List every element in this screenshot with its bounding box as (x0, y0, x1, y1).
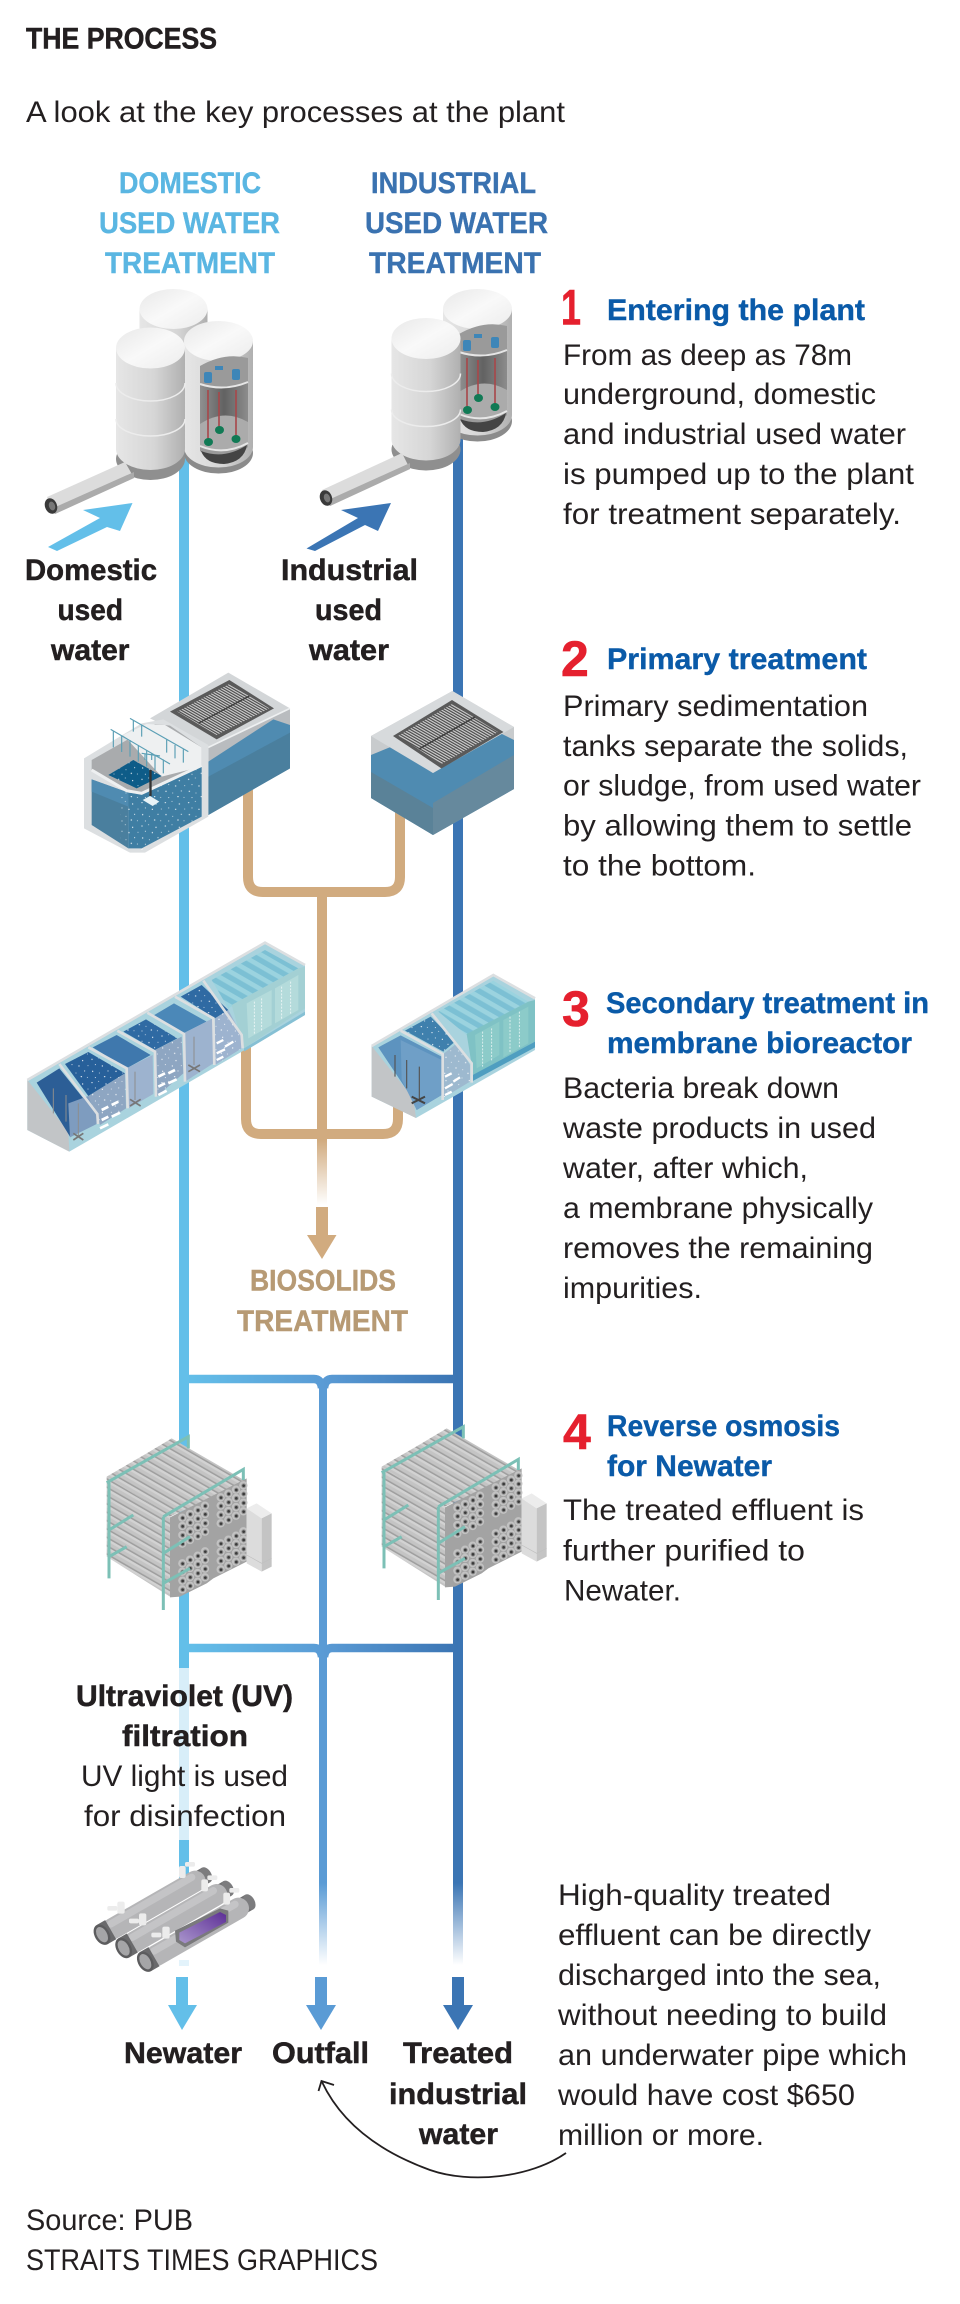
icon: industrial reverse osmosis unit (382, 1427, 547, 1600)
arrow: to biosolids treatment (307, 1207, 336, 1259)
label: ultraviolet filtration: filtration (122, 1720, 248, 1753)
label: biosolids treatment: TREATMENT (237, 1305, 408, 1338)
step 3: secondary treatment in membrane bioreactor: waste products in used (562, 1112, 876, 1145)
callout: high-quality treated effluent: an underwater pipe which (558, 2039, 907, 2072)
label: biosolids treatment: BIOSOLIDS (250, 1264, 396, 1298)
step 1: entering the plant: underground, domestic (563, 378, 876, 411)
callout: high-quality treated effluent: million or more. (558, 2119, 764, 2152)
step 3: secondary treatment in membrane bioreactor: removes the remaining (563, 1232, 873, 1265)
icon: domestic primary sedimentation tank (84, 673, 290, 853)
step 1: entering the plant: From as deep as 78m (563, 339, 852, 372)
step 4: reverse osmosis for newater: 4 (563, 1404, 591, 1460)
step 1: entering the plant: and industrial used water (563, 418, 906, 451)
label: domestic used water (25, 554, 157, 667)
step 3: secondary treatment in membrane bioreactor: Bacteria break down (563, 1072, 839, 1105)
source credit: STRAITS TIMES GRAPHICS (26, 2244, 378, 2277)
label: industrial used water: Industrial (281, 554, 418, 587)
step 1: entering the plant: is pumped up to the plant (563, 458, 915, 491)
label: industrial used water (281, 554, 418, 667)
biosolids pipes (246, 790, 400, 1205)
icon: UV filtration units (90, 1862, 258, 1975)
arrow: treated industrial water output (443, 1977, 473, 2030)
label: outfall: Outfall (272, 2037, 369, 2070)
callout: high-quality treated effluent (557, 1879, 907, 2152)
step 4: reverse osmosis for newater: Newater. (564, 1574, 681, 1608)
step 2: primary treatment: tanks separate the solids, (563, 730, 908, 763)
heading: domestic used water treatment (99, 167, 280, 280)
arrow: curved callout to outfall (318, 2081, 566, 2177)
heading: industrial used water treatment: USED WATER (365, 207, 548, 240)
arrow: domestic inflow (48, 503, 132, 551)
step 3: secondary treatment in membrane bioreactor: 3 (562, 981, 590, 1037)
subtitle: A look at the key processes at the plant (26, 96, 566, 129)
step 3: secondary treatment in membrane bioreactor (562, 981, 929, 1305)
label: newater: Newater (124, 2037, 242, 2070)
label: industrial used water: used (315, 594, 382, 627)
label: domestic used water: Domestic (25, 554, 157, 587)
label: ultraviolet filtration (76, 1680, 293, 1833)
arrow: industrial inflow (306, 503, 391, 551)
step 1: entering the plant (561, 280, 915, 531)
icon: domestic secondary treatment bioreactor (27, 943, 305, 1152)
label: ultraviolet filtration: for disinfection (84, 1800, 286, 1833)
callout: high-quality treated effluent: would have cost $650 (557, 2079, 855, 2112)
callout: high-quality treated effluent: discharged into the sea, (558, 1959, 881, 1992)
arrow: outfall output (306, 1977, 336, 2030)
step 2: primary treatment: Primary treatment (607, 643, 867, 676)
step 3: secondary treatment in membrane bioreactor: Secondary treatment in (606, 987, 929, 1020)
heading: industrial used water treatment: TREATMENT (369, 247, 541, 280)
icon: industrial tanks (318, 289, 512, 508)
icon: industrial secondary treatment bioreactor (372, 975, 535, 1118)
label: industrial used water: water (308, 634, 389, 667)
step 1: entering the plant: for treatment separately. (563, 498, 901, 531)
heading: industrial used water treatment (365, 167, 548, 280)
source credit (26, 2204, 378, 2277)
label: domestic used water: used (58, 594, 123, 627)
heading: domestic used water treatment: TREATMENT (105, 247, 275, 280)
step 3: secondary treatment in membrane bioreactor: impurities. (563, 1272, 702, 1305)
step 1: entering the plant: 1 (561, 280, 581, 336)
step 4: reverse osmosis for newater: The treated effluent is (563, 1494, 864, 1527)
step 2: primary treatment: by allowing them to settle (563, 810, 912, 842)
source credit: Source: PUB (26, 2204, 193, 2237)
domestic water pipe (179, 440, 189, 1966)
step 2: primary treatment (561, 631, 921, 882)
step 2: primary treatment: Primary sedimentation (563, 690, 868, 723)
industrial water pipe (453, 420, 463, 1965)
callout: high-quality treated effluent: effluent can be directly (558, 1919, 871, 1952)
label: treated industrial water: water (418, 2118, 498, 2151)
step 3: secondary treatment in membrane bioreactor: water, after which, (562, 1152, 808, 1185)
connecting pipes to outfall (188, 1379, 455, 1657)
icon: industrial primary sedimentation tank (371, 691, 514, 835)
heading: domestic used water treatment: DOMESTIC (119, 167, 261, 200)
step 4: reverse osmosis for newater (563, 1404, 864, 1608)
icon: domestic tanks (43, 289, 253, 516)
step 3: secondary treatment in membrane bioreactor: membrane bioreactor (607, 1027, 912, 1060)
label: ultraviolet filtration: UV light is used (81, 1760, 288, 1793)
title: THE PROCESS (26, 22, 217, 56)
callout: high-quality treated effluent: without needing to build (557, 1999, 887, 2032)
arrow: newater output (168, 1977, 197, 2030)
label: domestic used water: water (50, 634, 130, 667)
heading: industrial used water treatment: INDUSTRIAL (371, 167, 536, 200)
label: ultraviolet filtration: Ultraviolet (UV) (76, 1680, 293, 1713)
icon: domestic reverse osmosis unit (107, 1437, 272, 1610)
label: treated industrial water (389, 2037, 527, 2151)
step 2: primary treatment: or sludge, from used water (563, 770, 921, 802)
outfall pipe (319, 1385, 327, 1965)
step 2: primary treatment: to the bottom. (563, 850, 756, 882)
step 3: secondary treatment in membrane bioreactor: a membrane physically (563, 1192, 873, 1225)
label: biosolids treatment (237, 1264, 408, 1338)
label: treated industrial water: Treated (403, 2037, 513, 2070)
callout: high-quality treated effluent: High-quality treated (558, 1879, 831, 1912)
step 4: reverse osmosis for newater: further purified to (563, 1534, 805, 1568)
step 4: reverse osmosis for newater: for Newater (607, 1450, 772, 1483)
heading: domestic used water treatment: USED WATER (99, 207, 280, 240)
step 2: primary treatment: 2 (561, 631, 589, 687)
label: treated industrial water: industrial (389, 2078, 527, 2111)
step 4: reverse osmosis for newater: Reverse osmosis (607, 1410, 840, 1443)
step 1: entering the plant: Entering the plant (607, 294, 865, 327)
